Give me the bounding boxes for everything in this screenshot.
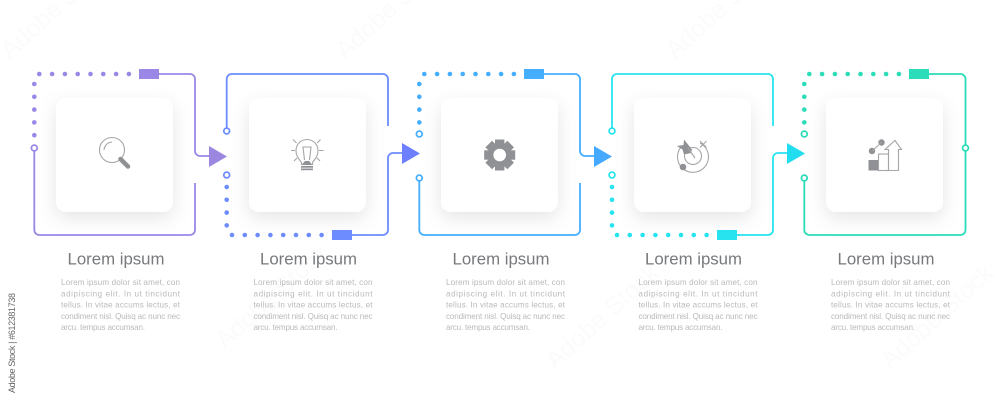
connector lines 1 — [34, 74, 212, 235]
card 2 — [249, 98, 366, 212]
description 1: tellus. In vitae accums lectus, et — [61, 301, 181, 310]
description 3: arcu. tempus accumsan. — [446, 323, 530, 332]
card 1 — [56, 98, 173, 212]
description 2: adipiscing elit. In ut tincidunt — [254, 289, 373, 298]
heading 5: Lorem ipsum — [838, 250, 934, 268]
connector lines 4 — [612, 74, 790, 235]
description 2: condiment nisl. Quisq ac nunc nec — [254, 312, 372, 321]
arrow 1 — [209, 146, 227, 167]
stock image id label: Adobe Stock | #612381738 — [7, 293, 17, 393]
heading 4: Lorem ipsum — [645, 250, 742, 268]
nodes 2 — [224, 128, 230, 178]
heading 3: Lorem ipsum — [452, 250, 550, 268]
heading 2: Lorem ipsum — [260, 250, 357, 268]
description 5: tellus. In vitae accums lectus, et — [831, 301, 951, 310]
description 5: condiment nisl. Quisq ac nunc nec — [831, 312, 950, 321]
panel: step 2 — [224, 74, 420, 332]
arrow 4 — [787, 143, 805, 164]
description 1 — [61, 278, 181, 332]
connector lines 2 — [227, 74, 405, 235]
dotted path 5 — [802, 69, 929, 125]
dotted path 4 — [610, 185, 737, 240]
description 4: Lorem ipsum dolor sit amet, con — [638, 278, 758, 287]
card 3 — [441, 98, 558, 212]
description 3: adipiscing elit. In ut tincidunt — [446, 289, 566, 298]
description 1: condiment nisl. Quisq ac nunc nec — [61, 312, 180, 321]
panel: step 3 — [416, 69, 612, 332]
description 4: adipiscing elit. In ut tincidunt — [638, 289, 758, 298]
node 1 — [31, 145, 37, 151]
description 5: arcu. tempus accumsan. — [831, 323, 915, 332]
card 4 — [634, 98, 751, 212]
description 3: condiment nisl. Quisq ac nunc nec — [446, 312, 565, 321]
dotted path 2 — [224, 185, 352, 240]
description 5 — [831, 278, 951, 332]
heading 1: Lorem ipsum — [68, 250, 164, 268]
watermark pattern: Adobe Stock — [540, 258, 665, 374]
panel: step 1 — [31, 69, 227, 332]
nodes 4 — [609, 128, 615, 178]
description 2 — [254, 278, 373, 332]
arrow 2 — [402, 143, 420, 164]
dotted path 1 — [32, 69, 159, 138]
icon: gear — [484, 140, 515, 170]
panel: step 4 — [609, 74, 805, 332]
card 5 — [826, 98, 943, 212]
panel: step 5 — [801, 69, 968, 332]
description 4 — [638, 278, 758, 332]
description 4: tellus. In vitae accums lectus, et — [638, 301, 758, 310]
description 2: arcu. tempus accumsan. — [254, 323, 338, 332]
description 1: arcu. tempus accumsan. — [61, 323, 145, 332]
description 2: tellus. In vitae accums lectus, et — [254, 301, 373, 310]
icon: light bulb — [291, 140, 324, 170]
icon: growth chart — [868, 139, 902, 170]
description 1: adipiscing elit. In ut tincidunt — [61, 289, 181, 298]
connector lines 5 — [804, 74, 966, 235]
dotted path 3 — [417, 69, 544, 125]
description 3 — [446, 278, 566, 332]
watermark pattern: Adobe Stock — [210, 238, 335, 354]
description 5: adipiscing elit. In ut tincidunt — [831, 289, 951, 298]
description 3: Lorem ipsum dolor sit amet, con — [446, 278, 565, 287]
description 3: tellus. In vitae accums lectus, et — [446, 301, 566, 310]
nodes 3 — [416, 131, 422, 181]
description 2: Lorem ipsum dolor sit amet, con — [254, 278, 372, 287]
connector lines 3 — [419, 74, 597, 235]
description 5: Lorem ipsum dolor sit amet, con — [831, 278, 950, 287]
nodes 5 — [801, 131, 968, 181]
icon: target with dart — [677, 140, 708, 172]
description 4: condiment nisl. Quisq ac nunc nec — [638, 312, 758, 321]
watermark pattern: Adobe Stock — [875, 258, 1000, 374]
description 1: Lorem ipsum dolor sit amet, con — [61, 278, 180, 287]
arrow 3 — [594, 146, 612, 167]
description 4: arcu. tempus accumsan. — [638, 323, 722, 332]
icon: magnifier — [100, 138, 128, 166]
